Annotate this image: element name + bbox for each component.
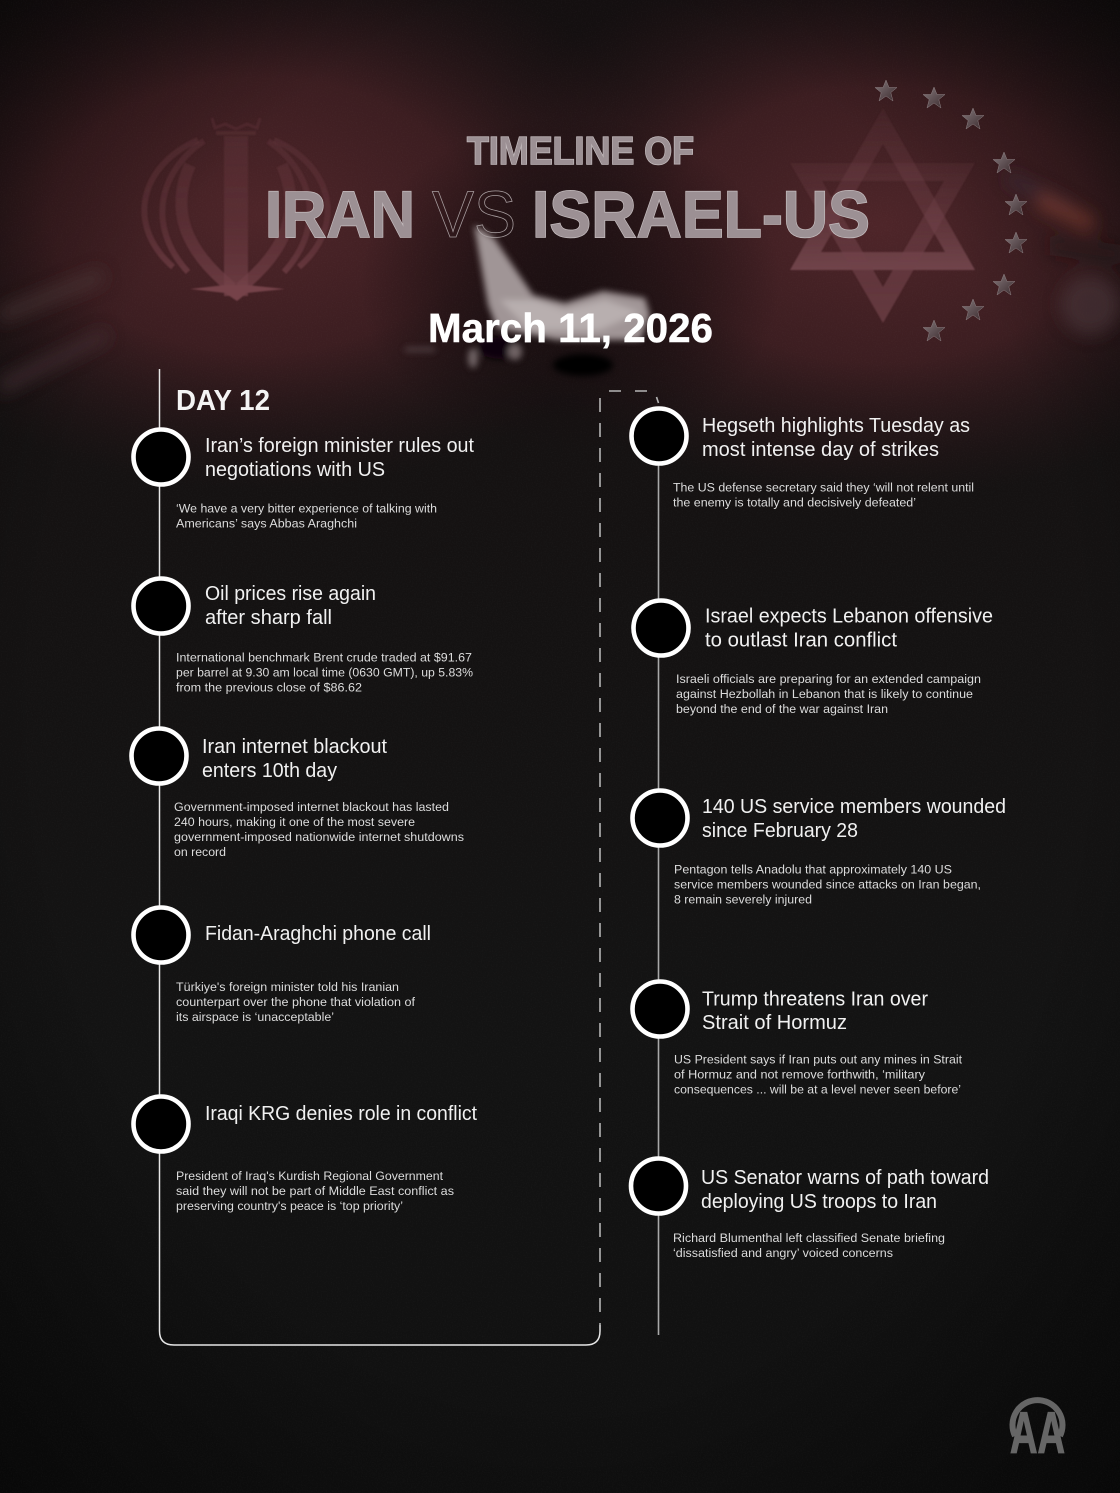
event: Fidan-Araghchi phone call bbox=[134, 908, 431, 1024]
event: 140 US service members: since February 28 bbox=[702, 819, 858, 842]
event: Iran internet blackout: 240 hours, making it one of the most severe bbox=[174, 815, 415, 829]
event: Israel Lebanon offensive: Israel expects Lebanon offensive bbox=[705, 604, 993, 628]
event: 140 US service members: service members wounded since attacks on Iran began, bbox=[674, 878, 981, 892]
event: oil prices: from the previous close of $86.62 bbox=[176, 680, 362, 694]
icon: Anadolu Agency logo: AA bbox=[1010, 1401, 1065, 1466]
event: Iran internet blackout: Government-imposed internet blackout has lasted bbox=[174, 800, 449, 814]
icon: Anadolu Agency logo bbox=[1010, 1400, 1065, 1466]
icon: Star of David bbox=[790, 108, 975, 323]
title: Iran vs Israel-US bbox=[265, 177, 870, 251]
event: 140 US service members: Pentagon tells Anadolu that approximately 140 US bbox=[674, 862, 952, 876]
heading: day 12: DAY 12 bbox=[176, 385, 270, 417]
event: Trump Strait of Hormuz: of Hormuz and not remove forthwith, ‘military bbox=[674, 1068, 926, 1082]
event: oil prices: International benchmark Brent crude traded at $91.67 bbox=[176, 650, 472, 664]
event: oil prices: per barrel at 9.30 am local time (0630 GMT), up 5.83% bbox=[176, 666, 473, 680]
date: March 11, 2026 bbox=[428, 305, 713, 351]
event: Israel Lebanon offensive: beyond the end of the war against Iran bbox=[676, 702, 888, 716]
event: Fidan-Araghchi phone call: Türkiye's foreign minister told his Iranian bbox=[176, 980, 399, 994]
title: Iran vs Israel-US: IRAN bbox=[265, 177, 415, 251]
event: Israel Lebanon offensive: to outlast Iran conflict bbox=[705, 628, 897, 652]
event: Iran's foreign minister: Iran’s foreign minister rules out bbox=[205, 434, 474, 457]
event: Iran internet blackout bbox=[132, 728, 464, 859]
title: Iran vs Israel-US: VS bbox=[432, 177, 516, 251]
event: Iran's foreign minister: Americans’ says Abbas Araghchi bbox=[176, 516, 357, 530]
event: Hegseth: The US defense secretary said they ‘will not relent until bbox=[673, 480, 974, 494]
event: Iran's foreign minister bbox=[134, 430, 474, 530]
event: 140 US service members bbox=[632, 790, 1006, 906]
event: Israel Lebanon offensive: against Hezbollah in Lebanon that is likely to continue bbox=[676, 687, 973, 701]
event: Fidan-Araghchi phone call: counterpart over the phone that violation of bbox=[176, 995, 416, 1009]
event: Trump Strait of Hormuz: US President says if Iran puts out any mines in Strait bbox=[674, 1052, 963, 1066]
event: US Senator warns: ‘dissatisfied and angry’ voiced concerns bbox=[673, 1246, 893, 1260]
event: Iraqi KRG: preserving country's peace is ‘top priority’ bbox=[176, 1199, 403, 1213]
title: timeline of: TIMELINE OF bbox=[467, 130, 694, 173]
event: Trump Strait of Hormuz: Trump threatens Iran over bbox=[702, 988, 928, 1010]
icon: Iran emblem bbox=[144, 118, 328, 301]
event: Iran internet blackout: enters 10th day bbox=[202, 759, 338, 782]
event: Iran internet blackout: government-imposed nationwide internet shutdowns bbox=[174, 830, 464, 844]
event: oil prices: after sharp fall bbox=[205, 606, 332, 629]
event: US Senator warns: US Senator warns of path toward bbox=[701, 1166, 989, 1189]
event: Trump Strait of Hormuz: consequences ... will be at a level never seen before’ bbox=[674, 1082, 961, 1096]
background streaks bbox=[0, 172, 1120, 396]
event: Iran internet blackout: on record bbox=[174, 845, 226, 859]
event: Israel Lebanon offensive: Israeli officials are preparing for an extended campaign bbox=[676, 672, 981, 686]
event: 140 US service members: 140 US service members wounded bbox=[702, 795, 1006, 818]
icon: ring of stars bbox=[875, 80, 1027, 341]
event: Iraqi KRG: Iraqi KRG denies role in conflict bbox=[205, 1102, 477, 1125]
event: US Senator warns: deploying US troops to Iran bbox=[701, 1190, 937, 1213]
event: Iraqi KRG: said they will not be part of Middle East conflict as bbox=[176, 1184, 454, 1198]
event: Hegseth: most intense day of strikes bbox=[702, 438, 939, 461]
event: oil prices: Oil prices rise again bbox=[205, 582, 376, 605]
event: Trump Strait of Hormuz: Strait of Hormuz bbox=[702, 1011, 847, 1034]
event: oil prices bbox=[134, 578, 473, 694]
event: Iraqi KRG bbox=[134, 1096, 477, 1213]
event: Hegseth: the enemy is totally and decisively defeated’ bbox=[673, 496, 916, 510]
event: Fidan-Araghchi phone call: Fidan-Araghchi phone call bbox=[205, 922, 431, 945]
event: Trump Strait of Hormuz bbox=[632, 982, 963, 1096]
event: Iran internet blackout: Iran internet blackout bbox=[202, 735, 387, 758]
event: US Senator warns bbox=[631, 1158, 989, 1260]
event: 140 US service members: 8 remain severely injured bbox=[674, 892, 812, 906]
event: Hegseth: Hegseth highlights Tuesday as bbox=[702, 414, 970, 437]
event: Fidan-Araghchi phone call: its airspace is ‘unacceptable’ bbox=[176, 1010, 334, 1024]
icon: fighter jet bbox=[405, 225, 650, 376]
event: Iran's foreign minister: negotiations with US bbox=[205, 458, 385, 481]
timeline connector line bbox=[160, 369, 658, 1345]
title: Iran vs Israel-US: ISRAEL-US bbox=[532, 177, 870, 251]
event: Iran's foreign minister: ‘We have a very bitter experience of talking with bbox=[176, 502, 437, 516]
event: US Senator warns: Richard Blumenthal left classified Senate briefing bbox=[673, 1231, 945, 1245]
event: Israel Lebanon offensive bbox=[634, 600, 993, 716]
event: Hegseth bbox=[632, 408, 974, 510]
event: Iraqi KRG: President of Iraq's Kurdish Regional Government bbox=[176, 1169, 444, 1183]
